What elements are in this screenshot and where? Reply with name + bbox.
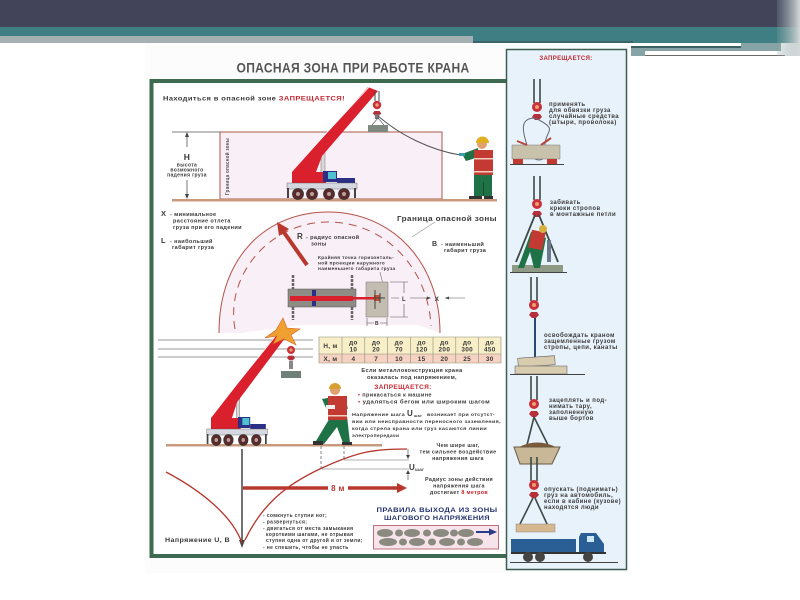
step voltage note: шаг (414, 413, 422, 418)
legend X: груза при его падении (173, 225, 242, 231)
table H and X (319, 337, 501, 363)
wider step note: Чем шире шаг, (436, 443, 480, 449)
rule 5: находятся люди (544, 505, 599, 511)
height dimension H (167, 132, 220, 199)
table H and X: 200 (439, 346, 450, 354)
worker with remote (459, 136, 493, 199)
rule 4: выше бортов (549, 415, 594, 422)
height dimension H: высота (177, 162, 197, 168)
forbidden heading: ЗАПРЕЩАЕТСЯ: (374, 384, 432, 391)
extreme point note: наименьшего габарита груза (318, 265, 396, 272)
table H and X: X, м (324, 356, 337, 363)
exit steps list: короткими шагами, не отрывая (266, 532, 353, 538)
axis label: Напряжение U, В (165, 537, 230, 544)
outer danger boundary arc (219, 212, 440, 333)
voltage axis (239, 449, 245, 548)
rule 5 (510, 457, 621, 563)
crane top view (288, 275, 388, 320)
step voltage note: электропередачи (352, 434, 399, 439)
forbidden list (358, 392, 490, 406)
U step label: шаг (415, 467, 424, 472)
extreme point note (318, 254, 396, 293)
boundary label (397, 215, 497, 237)
radius note: напряжения шага (433, 484, 486, 490)
table H and X: 7 (374, 356, 378, 363)
legend B: B (432, 241, 437, 248)
rule 1: (штыри, проволока) (549, 120, 617, 126)
table H and X: до (395, 340, 403, 346)
legend B: - наименьший (441, 241, 484, 248)
step voltage note: возникает при отсутст- (427, 413, 495, 418)
table H and X: 25 (463, 356, 471, 363)
table H and X: до (485, 340, 494, 346)
table H and X: 10 (349, 346, 357, 354)
voltage note: оказалась под напряжением, (367, 375, 457, 381)
exit rules heading: ШАГОВОГО НАПРЯЖЕНИЯ (384, 515, 490, 522)
rule 2 (510, 176, 616, 273)
panel: forbidden rigging actions (506, 50, 626, 570)
dimension B: B (375, 321, 379, 327)
legend B (432, 241, 487, 254)
rule 5: груз на автомобиль, (544, 492, 613, 499)
load top view (366, 282, 388, 317)
table H and X: 20 (440, 356, 448, 363)
rule 3: освобождать краном (544, 332, 615, 339)
step voltage note: U (407, 409, 413, 418)
exit steps list (263, 513, 363, 551)
legend R (297, 232, 360, 248)
rule 2: забивать (550, 199, 581, 206)
rule 4: нимать тару, (549, 404, 592, 410)
zone boundary vertical label: Граница опасной зоны (224, 138, 231, 195)
exit steps list: - двигаться от места замыкания (263, 526, 353, 532)
table H and X: до (463, 340, 472, 346)
forbidden list: • прикасаться к машине (358, 392, 432, 398)
panel: step voltage chart (165, 443, 498, 551)
step voltage note (352, 409, 501, 439)
warning heading: Находиться в опасной зоне ЗАПРЕЩАЕТСЯ! (163, 94, 345, 102)
exit steps list: - не спешить, чтобы не упасть (263, 544, 349, 551)
legend R: R (297, 232, 303, 241)
table H and X: до (372, 340, 381, 346)
voltage note (361, 368, 463, 381)
height dimension H: возможного (170, 168, 204, 174)
table H and X: 30 (486, 356, 494, 363)
legend L (161, 236, 215, 251)
legend X (161, 209, 242, 231)
table H and X: до (417, 340, 426, 346)
table H and X: 70 (395, 346, 403, 354)
dimension L: L (402, 297, 406, 303)
rule 3: защемленные грузом (544, 339, 616, 345)
legend X: X (161, 209, 166, 218)
table H and X: 120 (416, 346, 428, 354)
rule 4: зацеплять и под- (549, 398, 607, 404)
rule 3: стропы, цепи, канаты (544, 345, 618, 351)
rule 1: случайные средства (549, 113, 619, 120)
exit steps list: - сомкнуть ступни ног; (263, 513, 327, 519)
rule 4: заполненную (549, 410, 594, 416)
dimension B (367, 318, 387, 327)
exit rules heading (376, 507, 498, 522)
load on hook (368, 91, 388, 132)
voltage note: Если металлоконструкция крана (361, 368, 463, 374)
rule 5: если в кабине (кузове) (544, 498, 621, 505)
dimension L (390, 282, 428, 317)
step voltage note: Напряжение шага (352, 412, 405, 418)
rule 5: опускать (поднимать) (544, 487, 618, 493)
table H and X: 4 (351, 356, 355, 363)
voltage curves (166, 449, 407, 543)
main panel frame (152, 81, 512, 556)
extreme point note: Крайняя точка горизонталь- (318, 254, 394, 261)
panel: plan view of danger radius (161, 209, 497, 333)
title: ОПАСНАЯ ЗОНА ПРИ РАБОТЕ КРАНА (236, 60, 470, 76)
danger zone rectangle (220, 132, 442, 199)
height dimension H: падения груза (167, 172, 207, 178)
U step label: U (409, 463, 415, 472)
header band (0, 0, 800, 56)
table H and X: 10 (395, 356, 403, 363)
crane touching wire (207, 332, 286, 446)
legend L: L (161, 236, 166, 245)
height dimension H: H (184, 152, 190, 162)
rule 2: крюки стропов (550, 206, 601, 212)
exit steps list: ступни одна от другой и от земли; (266, 537, 363, 544)
shuffling steps diagram (374, 526, 498, 549)
forbidden list: • удаляться бегом или широким шагом (358, 398, 490, 406)
dimension X (427, 296, 465, 303)
radius note: Радиус зоны действия (425, 476, 493, 483)
ground line (166, 444, 382, 446)
wider step note: тем сильнее воздействие (419, 448, 497, 456)
extreme point note: ной проекции наружного (318, 260, 385, 266)
step voltage note: когда стрела крана или груз касаются линии (352, 427, 487, 432)
table H and X: до (440, 340, 449, 346)
table H and X: 450 (484, 346, 496, 354)
8 m arrow: 8 м (331, 484, 345, 493)
legend R: - радиус опасной (306, 234, 360, 241)
table H and X: до (349, 340, 358, 346)
rule 2: в монтажные петли (550, 212, 616, 218)
exit rules heading: ПРАВИЛА ВЫХОДА ИЗ ЗОНЫ (376, 507, 498, 514)
legend X: расстояние отлета (173, 218, 231, 224)
worker stepping (313, 383, 352, 445)
hook and load (281, 346, 301, 378)
panel: crane under voltage (158, 318, 501, 446)
legend X: - минимальное (170, 212, 216, 218)
radius note: достигает 8 метров (430, 490, 488, 496)
panel heading: ЗАПРЕЩАЕТСЯ: (539, 56, 593, 62)
panel: height of load fall (163, 86, 497, 202)
rule 3 (510, 277, 618, 375)
legend L: - наибольший (170, 238, 213, 245)
crane (287, 86, 378, 200)
inner dashed arc (234, 222, 431, 329)
rule 1 (510, 79, 619, 165)
boundary label: Граница опасной зоны (397, 215, 497, 223)
table H and X: 20 (372, 346, 380, 354)
radius arrow (277, 222, 307, 265)
exit steps list: - развернуться; (263, 520, 307, 526)
table H and X: 300 (461, 346, 473, 354)
dimension X: X (435, 297, 439, 303)
legend R: зоны (311, 242, 327, 248)
poster sheet (145, 43, 631, 573)
radius note (425, 476, 493, 496)
legend B: габарит груза (444, 247, 487, 254)
table H and X: 15 (418, 356, 426, 363)
wider step note: напряжения шага (432, 456, 485, 462)
8 m arrow (243, 483, 407, 493)
control cable (378, 116, 460, 155)
table H and X: H, м (323, 343, 338, 350)
power lines (158, 340, 313, 357)
step voltage note: вии или неисправности переносного заземления, (352, 420, 501, 425)
wider step note (419, 443, 497, 462)
rule 1: применять (549, 102, 586, 108)
rule 4 (514, 376, 607, 464)
rule 1: для обвязки груза (549, 107, 611, 114)
legend L: габарит груза (172, 244, 215, 251)
spark (265, 318, 300, 345)
step markers (321, 446, 344, 468)
ground line (172, 199, 497, 202)
